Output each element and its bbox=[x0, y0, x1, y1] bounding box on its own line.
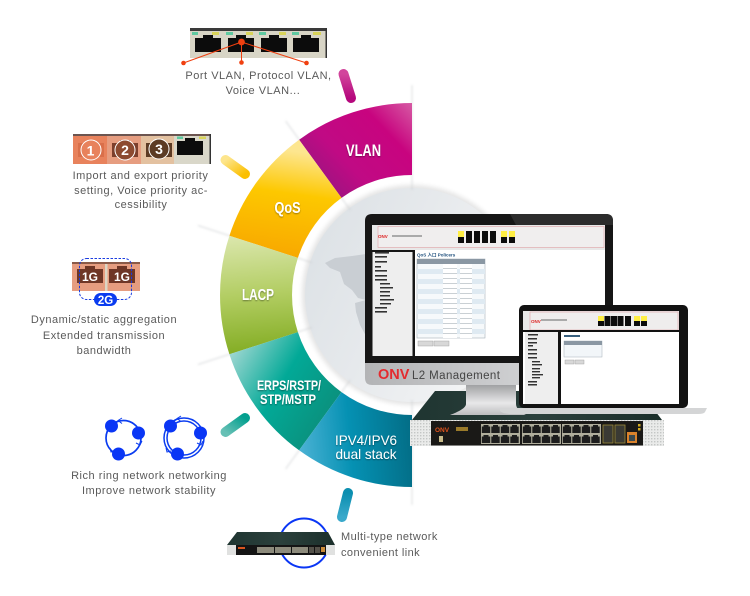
label: LACP: LACP bbox=[242, 287, 274, 304]
segment: LACP bbox=[220, 236, 298, 354]
2G badge bbox=[94, 293, 117, 306]
monitor body bbox=[365, 214, 613, 363]
laptop base bbox=[500, 408, 707, 414]
label: IPV4: IPV4/IPV6 bbox=[335, 432, 397, 448]
switch logo: ONV bbox=[435, 427, 450, 434]
LACP aggregation image bbox=[72, 258, 140, 307]
pill: LACP bbox=[180, 290, 206, 300]
label: IPV4 bbox=[335, 432, 397, 462]
LACP caption: Dynamic/static aggregation bbox=[31, 314, 177, 326]
VLAN split lines bbox=[181, 39, 309, 65]
segment: IPV4/IPV6 bbox=[299, 392, 412, 487]
SFP slots bbox=[603, 425, 625, 443]
switch caption: Multi-type network bbox=[341, 531, 438, 543]
radial separator shadows bbox=[198, 85, 412, 505]
RJ45 port groups bbox=[481, 424, 601, 444]
ring caption: Rich ring network networking bbox=[71, 470, 227, 482]
QoS caption: cessibility bbox=[115, 199, 167, 211]
segment: VLAN bbox=[299, 103, 412, 198]
desktop monitor bbox=[365, 214, 613, 415]
laptop lid bbox=[519, 305, 688, 408]
central grey disc bbox=[302, 185, 522, 405]
QoS caption: setting, Voice priority ac- bbox=[74, 185, 208, 197]
LACP aggregation image: 1G bbox=[82, 270, 98, 284]
QoS priority port image: 3 bbox=[155, 141, 163, 157]
small switch with link circle bbox=[227, 518, 335, 568]
VLAN caption: Port VLAN, Protocol VLAN, bbox=[185, 70, 332, 82]
LACP caption: bandwidth bbox=[77, 345, 131, 357]
label: IPV4: dual stack bbox=[336, 446, 397, 462]
monitor brand: ONV bbox=[378, 367, 410, 383]
monitor chin bbox=[365, 363, 613, 385]
pill: ERPS bbox=[226, 418, 245, 432]
laptop bbox=[500, 305, 707, 414]
LACP caption: Extended transmission bbox=[43, 330, 165, 342]
24-port rack switch bbox=[410, 391, 664, 446]
pill: IPV bbox=[342, 493, 348, 517]
QoS priority port image: 1 bbox=[87, 142, 95, 158]
LACP aggregation image: 1G bbox=[114, 270, 130, 284]
laptop table bbox=[564, 341, 602, 357]
nav tree bbox=[375, 252, 394, 313]
laptop screen: ONV bbox=[531, 319, 541, 324]
label: ERPS: STP/MSTP bbox=[260, 391, 316, 407]
QoS priority port image bbox=[73, 134, 211, 164]
switch front vents bbox=[410, 420, 664, 446]
label: VLAN: VLAN bbox=[346, 141, 381, 160]
policer table: QoS 入口 Policers bbox=[417, 252, 456, 258]
label: ERPS: ERPS/RSTP/ bbox=[257, 377, 321, 393]
LACP aggregation image: 2G bbox=[98, 295, 113, 307]
ring caption: Improve network stability bbox=[82, 485, 216, 497]
QoS priority port image: 2 bbox=[121, 142, 129, 158]
ring network icons bbox=[105, 416, 207, 460]
priority badges bbox=[81, 139, 169, 160]
monitor screen: ONV bbox=[378, 234, 388, 239]
double ring bbox=[164, 416, 207, 460]
VLAN caption: Voice VLAN... bbox=[226, 85, 300, 97]
console port bbox=[627, 432, 637, 443]
world map silhouette bbox=[325, 254, 366, 336]
pill: QoS bbox=[226, 160, 245, 174]
segment: ERPS/RSTP/STP/MSTP bbox=[229, 332, 342, 450]
dashed bracket bbox=[80, 258, 132, 300]
pill: VLAN bbox=[344, 74, 351, 98]
switch lid bbox=[412, 391, 662, 420]
VLAN port image bbox=[181, 28, 327, 65]
monitor caption: L2 Management bbox=[412, 370, 501, 382]
laptop nav tree bbox=[528, 334, 543, 386]
monitor stand bbox=[450, 385, 526, 415]
laptop screen bbox=[523, 311, 683, 404]
label: ERPS bbox=[257, 377, 321, 407]
single ring bbox=[105, 418, 145, 460]
QoS caption: Import and export priority bbox=[73, 170, 208, 182]
segment: QoS bbox=[229, 140, 342, 258]
bezel sheen bbox=[510, 214, 613, 225]
switch caption: convenient link bbox=[341, 547, 420, 559]
wheel of feature segments bbox=[220, 103, 412, 487]
switch front panel bbox=[431, 421, 643, 446]
label: QoS: QoS bbox=[274, 200, 301, 217]
monitor screen bbox=[372, 225, 605, 356]
